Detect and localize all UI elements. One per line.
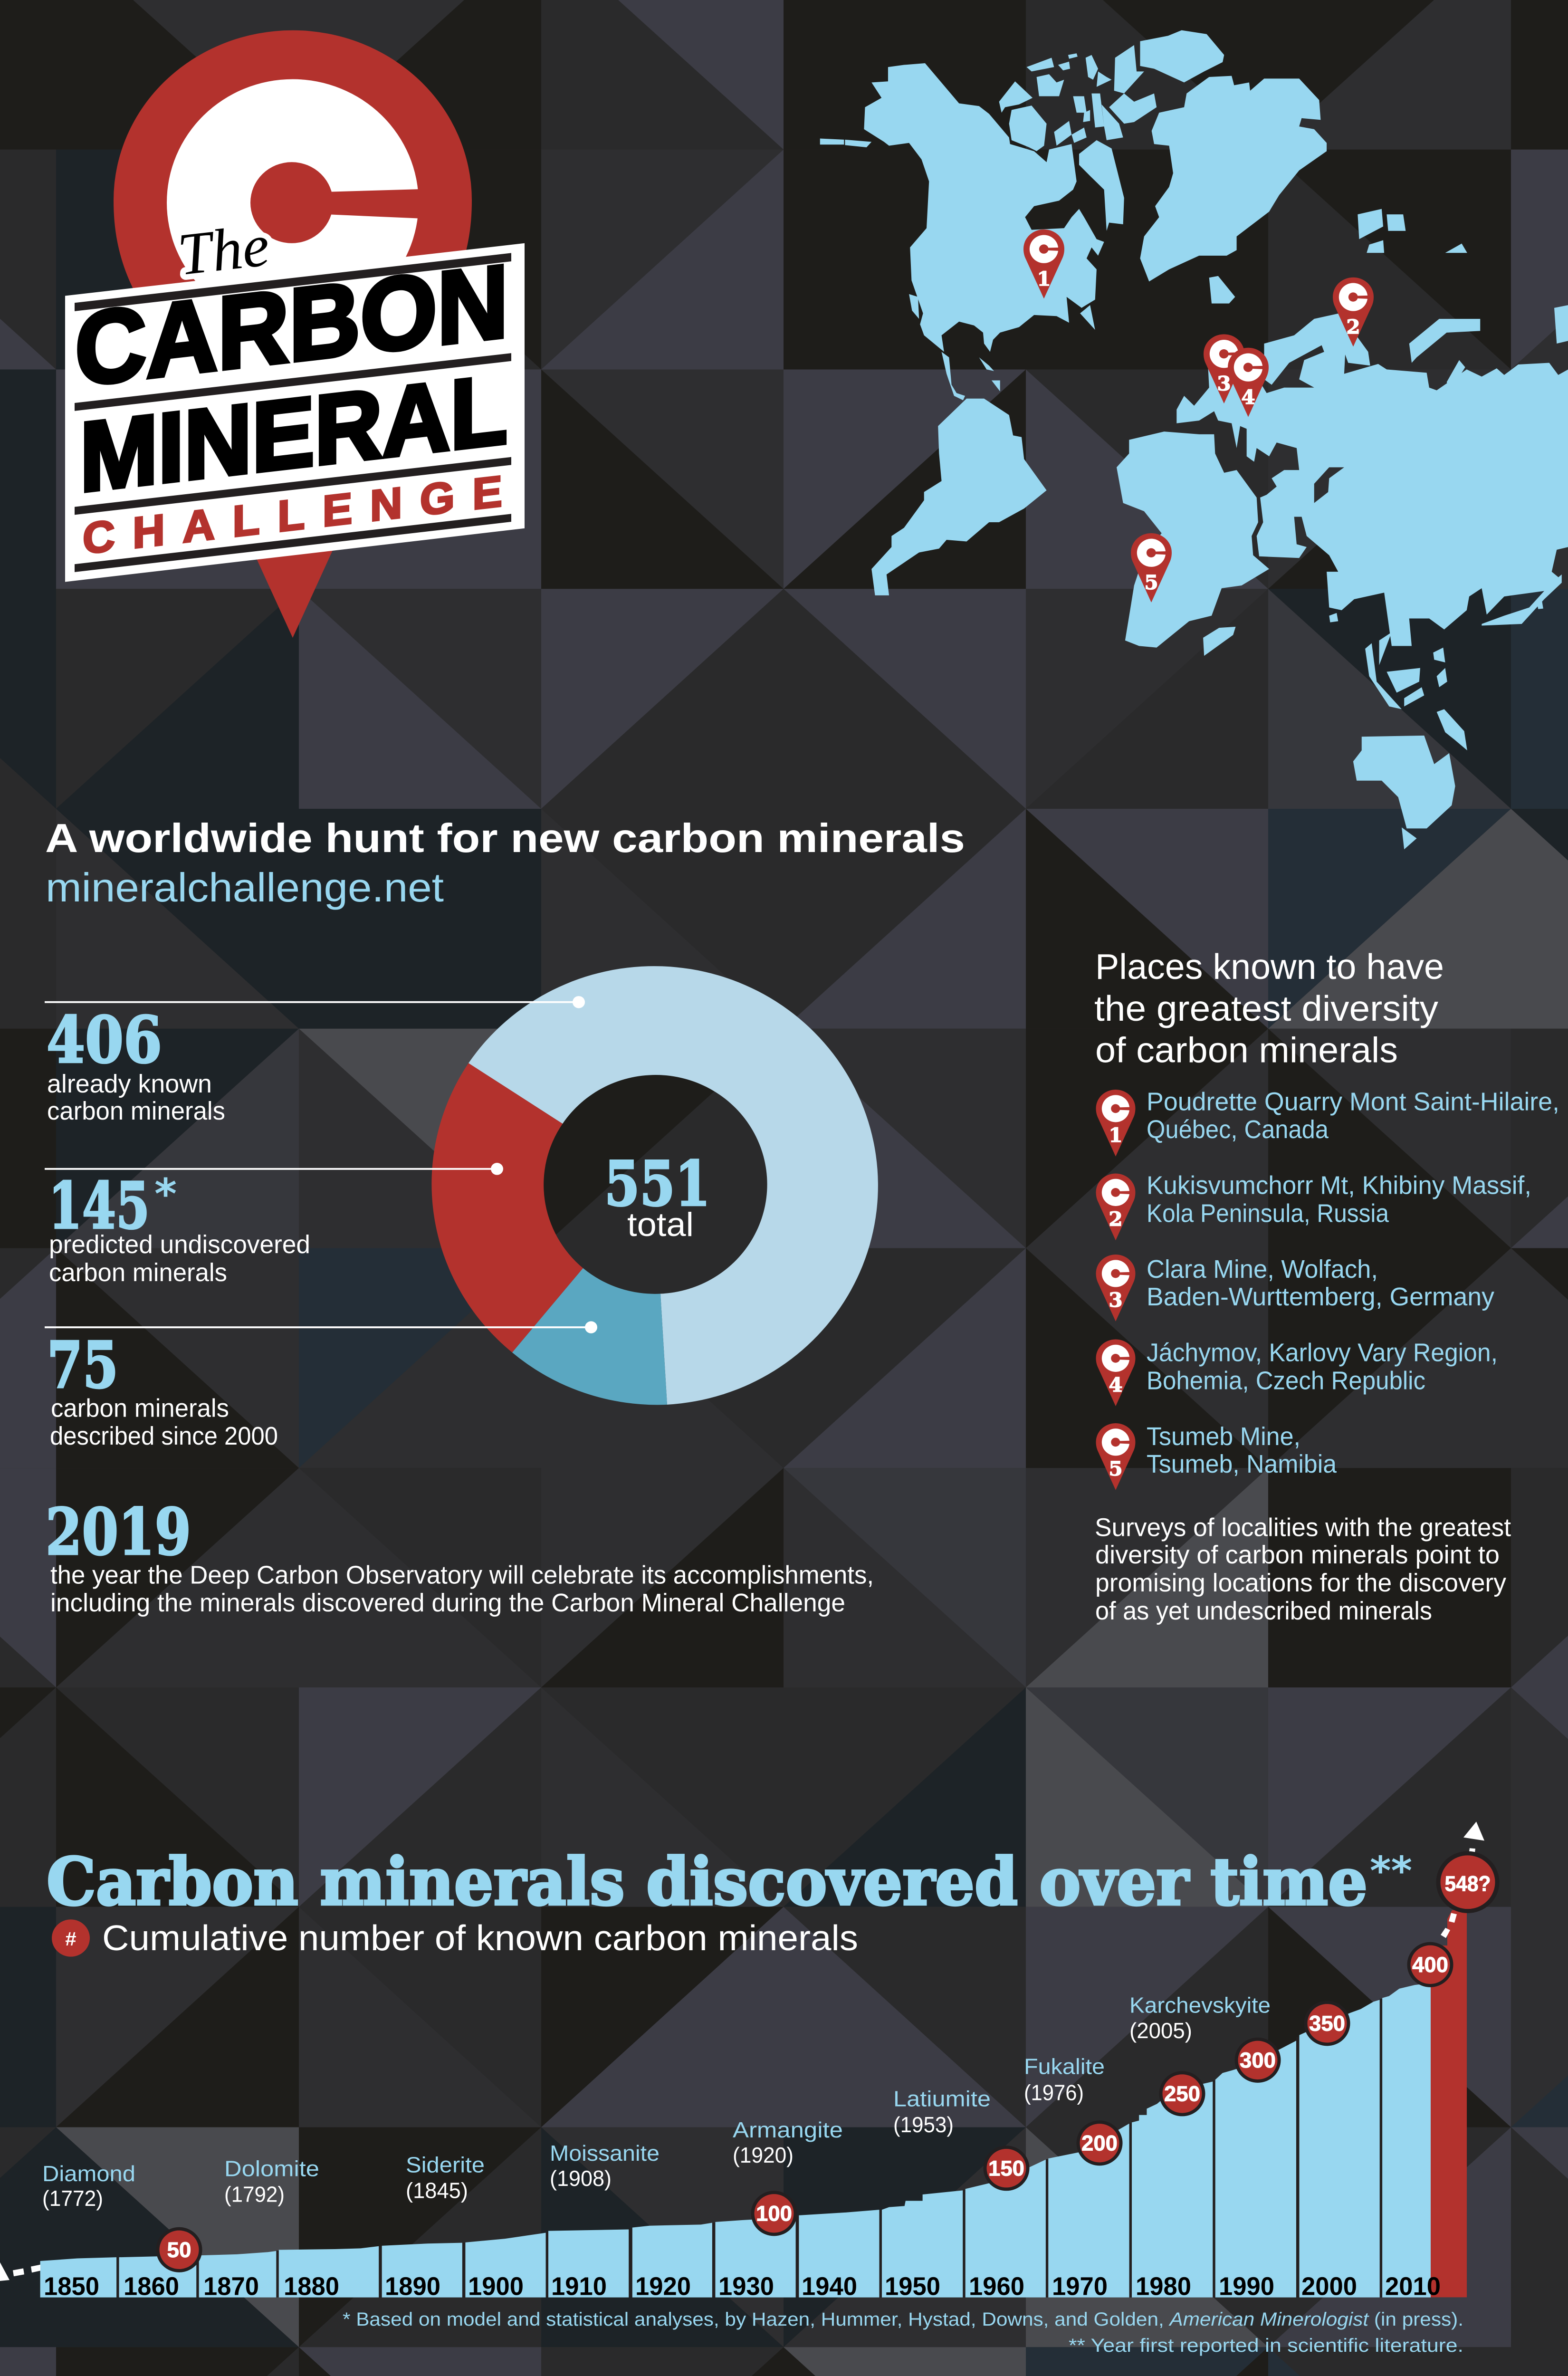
- stat: 406: [45, 996, 585, 1125]
- mineral label: Diamond: (1772): [42, 2186, 103, 2211]
- stat: 2019: 2019: [46, 1495, 191, 1569]
- arrow: past trend: [0, 2262, 40, 2281]
- text block: surveys note: Surveys of localities with the greatest: [1095, 1513, 1511, 1542]
- arrow: future trend: [1441, 1821, 1484, 1938]
- marker: 150: [985, 2147, 1028, 2189]
- stat: 406: 406: [47, 1003, 162, 1077]
- map pin 3: 3: [1217, 372, 1231, 395]
- Greenland: [1140, 76, 1327, 281]
- logo pin: [114, 30, 472, 638]
- list item 2: [1096, 1171, 1531, 1240]
- logo word: Challenge: CHALLENGE: [83, 466, 502, 563]
- donut slice: 406 known: [468, 966, 878, 1405]
- mineral label: Dolomite: Dolomite: [224, 2156, 319, 2181]
- heading: worldwide hunt: A worldwide hunt for new carbon minerals: [45, 816, 965, 861]
- list item 1: 1: [1109, 1123, 1123, 1147]
- predicted red bar: [1431, 1910, 1467, 2297]
- list item 4: Bohemia, Czech Republic: [1147, 1366, 1425, 1395]
- stat: 145: 145: [48, 1169, 150, 1243]
- map pin 1: 1: [1037, 267, 1051, 290]
- stat: 406: carbon minerals: [47, 1096, 225, 1125]
- donut chart: 551 total: [431, 966, 878, 1405]
- mineral label: Moissanite: Moissanite: [550, 2141, 660, 2165]
- decade labels: 1870: [203, 2272, 259, 2300]
- decade labels: 1910: [551, 2272, 607, 2300]
- text block: surveys note: of as yet undescribed minerals: [1095, 1596, 1432, 1625]
- list item 2: 2: [1109, 1207, 1123, 1230]
- marker: 548?: [1438, 1853, 1497, 1911]
- link: mineralchallenge.net: mineralchallenge.net: [46, 865, 444, 910]
- list item 4: [1096, 1338, 1498, 1406]
- decade labels: 1880: [284, 2272, 339, 2300]
- logo: The Carbon Mineral Challenge: [65, 30, 525, 638]
- mineral label: Fukalite: [1024, 2054, 1105, 2105]
- mineral label: Armangite: [733, 2117, 843, 2167]
- decade labels: 2000: [1301, 2272, 1357, 2300]
- heading: discovered over time: Carbon minerals discovered over time: [47, 1843, 1367, 1920]
- donut total value: 551: [604, 1147, 710, 1220]
- list item 3: [1096, 1255, 1495, 1322]
- footnotes: [343, 2308, 1463, 2356]
- logo banner: [65, 212, 525, 582]
- South America: [871, 399, 1047, 595]
- Siberian and Asian islands: [1329, 305, 1568, 750]
- panel: places heading: Places known to have: [1095, 947, 1444, 987]
- decade labels: [44, 2272, 1441, 2300]
- marker: 250: [1161, 2073, 1204, 2115]
- decade labels: 2010: [1385, 2272, 1441, 2300]
- decade labels: 1900: [468, 2272, 524, 2300]
- list item 4: Jáchymov, Karlovy Vary Region,: [1147, 1338, 1498, 1367]
- marker: 548?: 548?: [1444, 1872, 1491, 1896]
- Iceland, Svalbard and small northern islands: [1209, 209, 1467, 304]
- donut total label: total: [627, 1206, 694, 1244]
- list item 5: 5: [1109, 1457, 1123, 1480]
- mineral label: Moissanite: (1908): [550, 2166, 612, 2191]
- marker: 300: 300: [1240, 2048, 1276, 2072]
- mineral label: Siderite: (1845): [406, 2178, 468, 2203]
- bar chart: cumulative discoveries by decade: [40, 1910, 1467, 2300]
- stat: 2019: the year the Deep Carbon Observatory will celebrate its accomplishments,: [50, 1561, 874, 1589]
- mineral label: Armangite: (1920): [733, 2143, 794, 2167]
- list item 3: Clara Mine, Wolfach,: [1147, 1255, 1378, 1284]
- map pin 5: 5: [1144, 571, 1158, 594]
- list item 3: 3: [1109, 1288, 1123, 1312]
- mineral label: Fukalite: (1976): [1024, 2080, 1084, 2105]
- decade labels: 1970: [1052, 2272, 1108, 2300]
- panel: places heading: [1094, 947, 1444, 1070]
- mineral label: Dolomite: [224, 2156, 319, 2206]
- mineral label: Fukalite: Fukalite: [1024, 2054, 1105, 2079]
- list item 4: 4: [1109, 1373, 1123, 1396]
- marker: 350: [1306, 2002, 1348, 2044]
- marker: 300: [1236, 2039, 1279, 2081]
- world map: [820, 30, 1568, 849]
- decade labels: 1930: [718, 2272, 774, 2300]
- stat: 2019: including the minerals discovered during the Carbon Mineral Challenge: [50, 1589, 845, 1617]
- list item 5: [1096, 1422, 1337, 1490]
- marker: 400: 400: [1412, 1953, 1448, 1977]
- mineral label: Latiumite: [893, 2087, 991, 2137]
- decade labels: 1920: [635, 2272, 691, 2300]
- mineral label: Karchevskyite: Karchevskyite: [1129, 1993, 1271, 2017]
- footnotes: ** Year first reported in scientific literature.: [1069, 2334, 1463, 2356]
- legend: cumulative number: Cumulative number of known carbon minerals: [102, 1918, 858, 1958]
- list item 3: Baden-Wurttemberg, Germany: [1147, 1283, 1495, 1311]
- logo word: The: The: [174, 212, 273, 288]
- mineral label: Armangite: Armangite: [733, 2117, 843, 2142]
- mineral label: Moissanite: [550, 2141, 660, 2191]
- map pin 2: 2: [1346, 315, 1360, 338]
- mineral label: Siderite: [406, 2153, 485, 2203]
- decade labels: 1990: [1219, 2272, 1274, 2300]
- decade labels: 1860: [124, 2272, 179, 2300]
- marker: 200: 200: [1081, 2131, 1118, 2155]
- list item 5: Tsumeb, Namibia: [1147, 1450, 1337, 1478]
- mineral label: Diamond: [42, 2162, 135, 2211]
- list item 1: Poudrette Quarry Mont Saint-Hilaire,: [1147, 1087, 1559, 1116]
- stat: 75: described since 2000: [50, 1422, 278, 1450]
- mineral label: Latiumite: (1953): [893, 2113, 954, 2137]
- arctic islands: [820, 30, 1224, 330]
- marker: 350: 350: [1309, 2012, 1345, 2035]
- marker: 50: [158, 2229, 201, 2271]
- donut slice: 145 predicted: [431, 1063, 583, 1352]
- list item 1: Québec, Canada: [1147, 1115, 1329, 1144]
- Australia: [1353, 736, 1455, 849]
- panel: places heading: the greatest diversity: [1094, 989, 1438, 1029]
- mineral label: Dolomite: (1792): [224, 2182, 285, 2206]
- decade labels: 1890: [385, 2272, 440, 2300]
- bars 1940 to 2010: [799, 1983, 1431, 2298]
- panel: places heading: of carbon minerals: [1095, 1030, 1398, 1070]
- map pin 4: 4: [1241, 385, 1255, 409]
- Africa and Madagascar: [1117, 431, 1269, 656]
- bars 1850 to 1930: [40, 2216, 800, 2298]
- marker: 100: 100: [756, 2202, 792, 2225]
- North America: [864, 63, 1104, 352]
- marker: 100: [753, 2193, 795, 2234]
- map pin 3: [1204, 334, 1244, 403]
- stat: 75: 75: [47, 1328, 118, 1402]
- stat: 75: [45, 1321, 597, 1450]
- mineral label: Diamond: Diamond: [42, 2162, 135, 2186]
- donut slice: 75 since 2000: [512, 1268, 667, 1405]
- footnotes: * Based on model and statistical analyses, by Hazen, Hummer, Hystad, Downs, and Golden, American Minerologist (in press).: [343, 2308, 1463, 2330]
- Eurasia: [1176, 313, 1568, 646]
- marker: 200: [1078, 2122, 1121, 2164]
- stat: 2019: [46, 1495, 874, 1617]
- map pin 5: [1131, 533, 1172, 603]
- map pin 4: [1228, 348, 1269, 417]
- marker: 250: 250: [1164, 2082, 1200, 2106]
- stat: 145: *: [154, 1170, 177, 1219]
- mineral label: Siderite: Siderite: [406, 2153, 485, 2177]
- list item 2: Kukisvumchorr Mt, Khibiny Massif,: [1147, 1171, 1531, 1200]
- stat: 145: predicted undiscovered: [49, 1230, 310, 1259]
- list item 5: Tsumeb Mine,: [1147, 1422, 1300, 1451]
- mineral label: Latiumite: Latiumite: [893, 2087, 991, 2111]
- legend: cumulative number: #: [65, 1927, 76, 1950]
- list item 2: Kola Peninsula, Russia: [1147, 1199, 1389, 1227]
- map pin 1: [1023, 230, 1064, 298]
- text block: surveys note: [1095, 1513, 1511, 1625]
- mineral label: Karchevskyite: [1129, 1993, 1271, 2043]
- stat: 145: carbon minerals: [49, 1258, 227, 1287]
- heading: discovered over time: **: [1370, 1848, 1412, 1894]
- marker: 400: [1409, 1944, 1452, 1985]
- text block: surveys note: diversity of carbon minerals point to: [1095, 1541, 1500, 1569]
- decade labels: 1960: [969, 2272, 1024, 2300]
- decade labels: 1950: [885, 2272, 940, 2300]
- logo word: Carbon: CARBON: [75, 242, 508, 408]
- decade labels: 1850: [44, 2272, 99, 2300]
- stat: 75: carbon minerals: [51, 1394, 229, 1422]
- mineral label: Karchevskyite: (2005): [1129, 2019, 1192, 2043]
- stat: 145: [45, 1163, 503, 1287]
- decade labels: 1980: [1136, 2272, 1191, 2300]
- marker: 50: 50: [167, 2238, 191, 2262]
- marker: 150: 150: [988, 2156, 1024, 2180]
- logo word: Mineral: MINERAL: [80, 354, 507, 513]
- list item 1: [1096, 1087, 1559, 1157]
- stat: 406: already known: [47, 1070, 212, 1098]
- decade labels: 1940: [802, 2272, 857, 2300]
- text block: surveys note: promising locations for the discovery: [1095, 1569, 1507, 1597]
- central America and Caribbean: [942, 352, 1000, 400]
- map pin 2: [1333, 278, 1374, 346]
